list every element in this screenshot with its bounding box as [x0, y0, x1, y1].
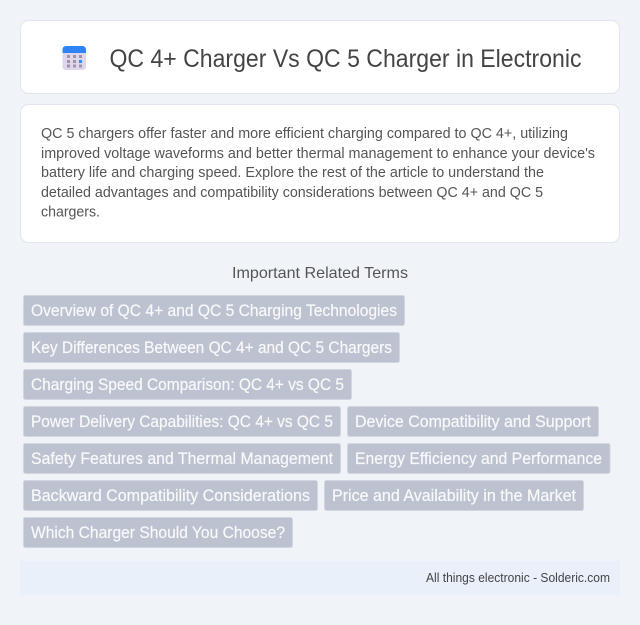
text block: intro paragraph: improved voltage waveforms and better thermal management to enhance your device's — [41, 146, 595, 162]
text block: intro paragraph — [41, 126, 595, 220]
tag: safety features — [24, 444, 340, 474]
tag: which charger — [24, 518, 292, 548]
tag list: related terms — [24, 296, 610, 548]
heading: related terms: Important Related Terms — [232, 265, 408, 282]
footer — [20, 561, 620, 595]
text block: intro paragraph: battery life and charging speed. Explore the rest of the article to understand the — [41, 165, 544, 181]
tag: device compatibility: Device Compatibility and Support — [355, 413, 591, 431]
tag: power delivery — [24, 406, 340, 436]
footer: All things electronic - Solderic.com — [426, 571, 610, 585]
tag: device compatibility — [348, 406, 598, 436]
tag: overview: Overview of QC 4+ and QC 5 Charging Technologies — [31, 302, 397, 320]
tag: power delivery: Power Delivery Capabilities: QC 4+ vs QC 5 — [31, 413, 333, 431]
tag: charging speed — [24, 370, 352, 400]
tag: key differences: Key Differences Between QC 4+ and QC 5 Chargers — [31, 339, 392, 357]
panel: title card — [20, 20, 620, 94]
tag: price and availability: Price and Availability in the Market — [332, 487, 576, 505]
tag: safety features: Safety Features and Thermal Management — [31, 450, 333, 468]
title: QC 4+ Charger Vs QC 5 Charger in Electronic — [110, 45, 582, 73]
tag: charging speed: Charging Speed Comparison: QC 4+ vs QC 5 — [31, 376, 344, 394]
tag: key differences — [24, 332, 400, 362]
text block: intro paragraph: detailed advantages and compatibility considerations between QC 4+ and QC 5 — [41, 185, 543, 201]
tag: which charger: Which Charger Should You Choose? — [31, 524, 285, 542]
tag: backward compatibility: Backward Compatibility Considerations — [31, 487, 310, 505]
icon: calendar — [62, 46, 86, 70]
tag: backward compatibility — [24, 480, 318, 510]
tag: price and availability — [324, 480, 584, 510]
text block: intro paragraph: QC 5 chargers offer faster and more efficient charging compared to QC 4+, utilizing — [41, 126, 568, 142]
tag: energy efficiency: Energy Efficiency and Performance — [355, 450, 602, 468]
tag: overview — [24, 296, 404, 326]
text block: intro paragraph: chargers. — [41, 204, 100, 220]
tag: energy efficiency — [348, 444, 610, 474]
panel: intro description — [20, 104, 620, 242]
